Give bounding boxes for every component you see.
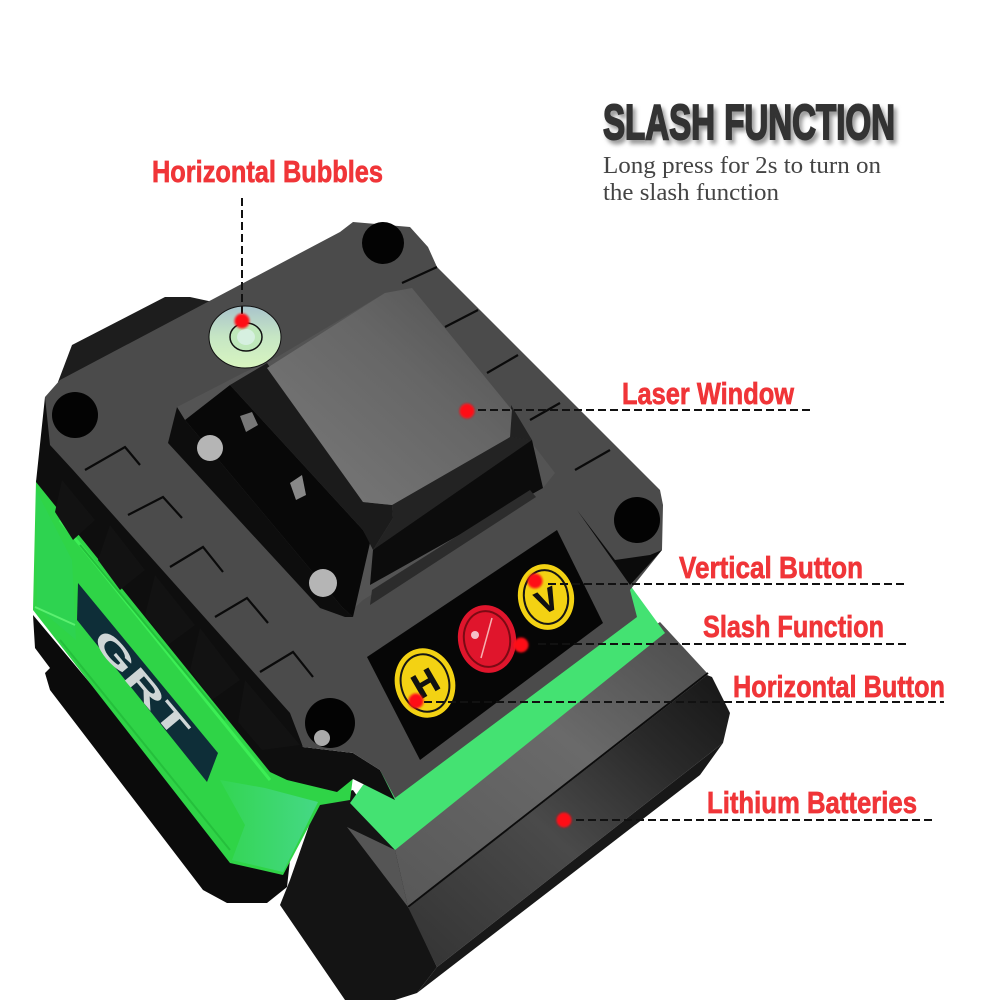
callout: Horizontal Bubbles: Horizontal Bubbles	[152, 154, 383, 189]
battery end cap	[280, 790, 437, 1000]
callout: Horizontal Button: Horizontal Button	[733, 669, 945, 704]
top plate	[45, 222, 663, 798]
description text: Long press for 2s to turn on	[603, 153, 881, 179]
button: H	[387, 641, 463, 725]
callout: Lithium Batteries	[556, 785, 932, 828]
laser window housing	[168, 288, 555, 617]
callout: Horizontal Bubbles	[152, 154, 383, 328]
device: laser level	[33, 222, 730, 1000]
green battery plate	[350, 585, 665, 850]
callout: Vertical Button	[528, 550, 906, 588]
screws	[197, 435, 223, 461]
callout: Vertical Button: Vertical Button	[679, 550, 863, 585]
green housing side	[33, 480, 353, 875]
window side walls	[230, 363, 393, 550]
callout: Horizontal Button	[408, 669, 945, 708]
callout: Laser Window: Laser Window	[622, 376, 795, 411]
callout: Laser Window	[460, 376, 812, 418]
corner darkening	[577, 510, 662, 585]
control panel	[367, 530, 603, 760]
glass glints	[240, 412, 258, 432]
button: H: H	[406, 661, 446, 706]
icon: horizontal bubble vial	[209, 306, 281, 368]
callout: Slash Function: Slash Function	[703, 609, 884, 644]
side teeth	[55, 480, 300, 750]
button: V	[513, 560, 579, 634]
description text	[603, 153, 881, 206]
battery corner strip	[347, 827, 408, 907]
laser window cover	[267, 288, 512, 505]
edge tabs	[85, 267, 610, 677]
rear top section	[58, 297, 213, 385]
black rim of body	[36, 397, 395, 800]
callout: Lithium Batteries: Lithium Batteries	[707, 785, 917, 820]
lithium battery	[347, 622, 730, 993]
description text: the slash function	[603, 180, 779, 206]
button: slash function	[453, 600, 521, 678]
GRT label	[77, 583, 218, 782]
button: V: V	[530, 579, 565, 621]
screw holes	[362, 222, 404, 264]
lower black base	[33, 615, 290, 903]
callout: Slash Function	[514, 609, 906, 652]
GRT label: GRT	[86, 623, 196, 746]
